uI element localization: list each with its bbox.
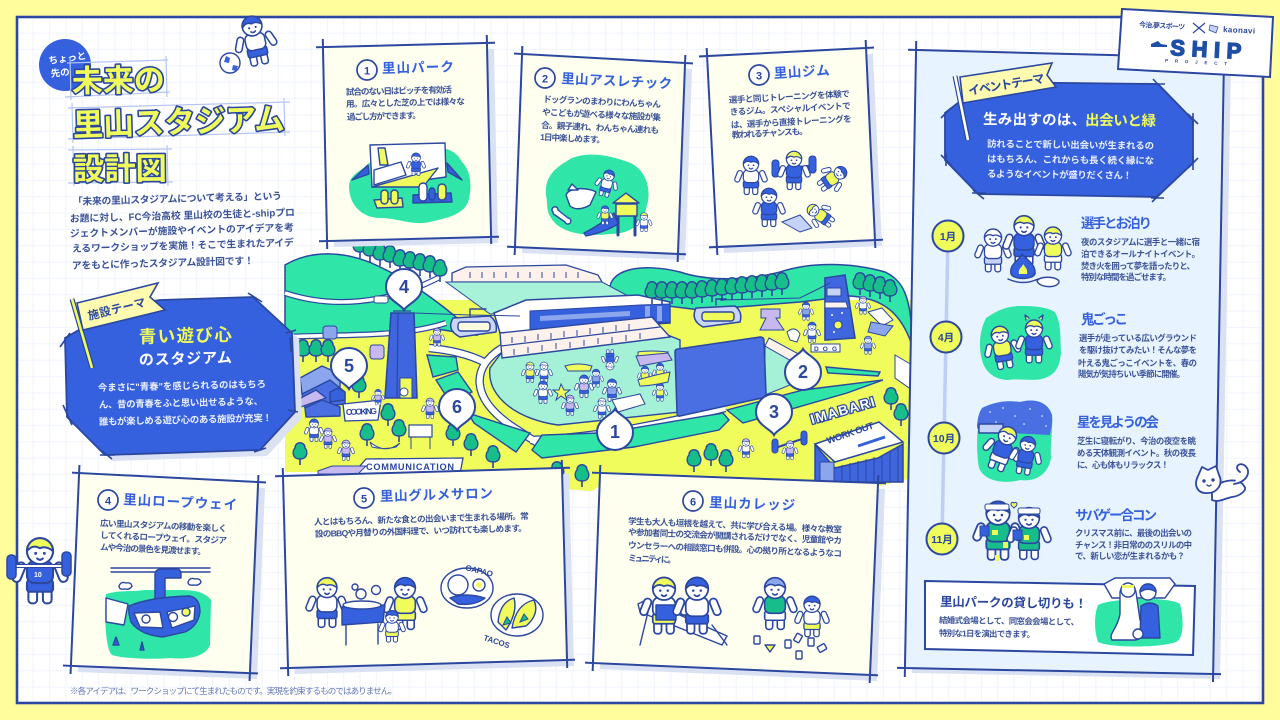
number badge [354,488,374,508]
card text: 合。親子連れ、わんちゃん連れも [541,119,659,135]
illustration: wedding [1095,578,1183,646]
event text: 4: 鬼ごっこ [1081,311,1128,327]
card text: 学生も大人も垣根を越えて、共に学び合える場。様々な教室 [628,515,843,535]
card heading: 里山グルメサロン [380,485,493,504]
picnic people [304,296,445,460]
card 5: gourmet salon [276,461,574,675]
facility flag: 施設テーマ [86,295,147,323]
card text: 広い里山スタジアムの移動を楽しく [100,517,227,534]
number badge: 6 [690,496,696,508]
facility body text: 誰もが楽しめる遊び心のある施設が充実！ [99,412,272,427]
event text: 4 [1078,311,1197,379]
event heading: 生み出すのは、 [983,111,1086,129]
event text: 4: 叶える鬼ごっこイベントを、春の [1078,358,1197,368]
number badge: 5 [361,494,367,506]
card heading: 里山ジム [773,63,830,81]
intro text: 「未来の里山スタジアムについて考える」という [73,189,282,208]
title: 未来の [72,62,165,99]
event body text: 訪れることで新しい出会いが生まれるの [987,138,1154,151]
left hill [285,254,476,336]
card text: やこどもが遊べる様々な施設が集 [542,106,662,122]
character: soccer kid [220,12,282,73]
map pin 3: 3 [769,402,779,422]
callout: private hire [925,578,1195,655]
facility body text [98,378,272,427]
event text: 10: 星を見ようの会 [1077,415,1160,430]
event text: 10: 芝生に寝転がり、今治の夜空を眺 [1077,436,1197,446]
illustration: gondola [105,568,211,659]
card text: 教われるチャンスも。 [732,125,808,140]
event text: 1: 焚き火を囲って夢を語ったりと、 [1081,261,1195,271]
card text: 用。広々とした芝の上では様々な [346,95,465,109]
card heading: 里山カレッジ [709,495,795,513]
callout: private hire: 里山パークの貸し切りも！ [940,594,1087,611]
illustration: survival game [972,501,1052,561]
event text: 11: サバゲー合コン [1075,507,1157,523]
green verges [532,413,729,458]
number badge: 1 [364,66,370,78]
card text [314,510,529,539]
illustration: gapao and tacos: GAPAO [465,563,494,579]
illustration: gapao and tacos [441,563,543,650]
illustration: gapao and tacos: TACOS [482,633,511,650]
event text: 4: を駆け抜けてみたい！そんな夢を [1079,345,1197,355]
number badge [98,490,118,510]
card 4: ropeway [64,466,265,680]
play area and dog run [760,296,912,390]
event text: 10: める天体観測イベント。秋の夜長 [1077,448,1197,458]
card text: 選手と同じトレーニングを体験で [729,88,850,105]
gondola left [451,309,496,337]
title: 里山スタジアム [72,102,285,143]
card heading: 里山パーク [382,59,454,76]
pitch [490,332,680,425]
intro text: お題に対し、FC今治高校 里山校の生徒と-shipプロ [70,206,295,225]
card heading: 里山アスレチック [561,71,672,91]
communication banner [318,458,463,474]
left village buildings [297,366,345,417]
card text: 人とはもちろん、新たな食との出会いまで生まれる場所。常 [314,510,529,527]
intro text: アをもとに作ったスタジアム設計図です！ [72,254,254,272]
road around pitch [429,348,725,446]
event text: 1: 選手とお泊り [1081,215,1152,231]
title: 設計図 [73,151,167,187]
intro text: ジェクトメンバーが施設やイベントのアイデアを考 [70,221,294,240]
illustration: play with cards [752,578,830,659]
facility body text: 今まさに"青春"を感じられるのはもちろ [98,378,266,393]
card 2: athletics [508,47,692,261]
title badge [39,39,91,91]
seating rows [500,317,670,358]
character: dog [1196,464,1248,501]
event text: 1 [1081,215,1200,282]
event flag [955,63,1056,140]
number badge [749,65,769,85]
map pin 4: 4 [399,277,409,297]
card text [628,515,843,565]
logo box: PROJECT [1165,58,1227,66]
intro text: えるワークショップを実施！そこで生まれたアイデ [72,236,294,255]
month 11 [926,524,958,554]
event theme hexagon [941,63,1198,202]
tree rows [353,236,897,304]
map pin 6 [439,389,475,430]
map pin 4 [386,269,422,310]
panel: facility theme: のスタジアム [139,350,232,369]
character: barbell athlete [7,538,71,603]
right tower [825,275,855,340]
panel: events [898,42,1231,681]
month 1 [932,220,964,252]
card 6: college [586,466,885,682]
title badge: ちょっと [48,51,87,67]
communication banner: COMMUNICATION [366,462,454,472]
card text: 設のBBQや月替りの外国料理で、いつ訪れても楽しめます。 [315,522,527,539]
logo box: SHIP [1170,35,1242,64]
card heading: 里山ロープウェイ [123,492,237,513]
event text: 11: クリスマス前に、最後の出会いの [1075,528,1192,538]
month 4: 4月 [938,332,954,344]
map pin 1 [597,409,633,450]
card text [540,93,662,145]
workout runner and machine [738,431,807,460]
logo box: kaonavi [1223,25,1255,36]
panel: facility theme [60,283,302,461]
event text: 1: 泊できるオールナイトイベント。 [1081,249,1200,259]
illustration: bench [638,578,727,645]
card text [100,517,228,557]
people on pitch [521,350,672,418]
illustration: outdoor cinema [349,143,470,223]
event text: 4: 選手が走っている広いグラウンド [1079,333,1197,343]
illustration: bbq [305,578,428,645]
illustration: stargazing [976,401,1052,482]
imabari sign: IMABARI [809,394,876,427]
illustration: five athletes [734,151,854,234]
cooking banner [343,400,381,421]
event flag: イベントテーマ [967,71,1045,98]
facility heading: 青い遊び心 [139,325,233,347]
month 4 [930,322,962,352]
facility body text: ん、昔の青春をふと思い出せるような、 [99,395,263,410]
event theme hexagon: 出会いと緑 [1085,112,1157,130]
right hill [610,264,912,345]
card text: きるジム。スペシャルイベントで [730,101,851,117]
logo box: 今治.夢スポーツ [1139,20,1185,31]
hill roads [285,278,446,337]
card text: 1日中楽しめます。 [540,131,605,145]
logo box [1118,9,1273,77]
gondola right [694,299,741,327]
illustration: campfire [974,216,1072,287]
card text: ウンセラーへの相談窓口も併設。心の拠り所となるようなコ [628,539,842,559]
event text: 10 [1077,415,1197,470]
map pin 2: 2 [798,362,808,382]
map ground [285,300,912,491]
number badge [683,491,703,511]
event text: 4: 陽気が気持ちいい季節に開催。 [1078,369,1185,379]
event text: 1: 夜のスタジアムに選手と一緒に宿 [1081,237,1200,247]
character: barbell athlete: 10 [34,572,42,579]
play area and dog run: DOG [814,346,837,353]
number badge: 4 [105,496,112,508]
event text: 11: で、新しい恋が生まれるかも？ [1075,551,1185,561]
back stand [452,265,602,282]
title [65,56,290,187]
card text [346,84,465,122]
event text: 1: 特別な時間を過ごせます。 [1081,272,1171,282]
event text: 11: チャンス！非日常ののスリルの中 [1075,540,1192,550]
left tower [385,311,417,398]
event body text: るようなイベントが盛りだくさん！ [987,168,1132,181]
card text: ムや今治の景色を見渡せます。 [100,541,206,557]
footnote: ※各アイデアは、ワークショップにて生まれたものです。実現を約束するものではありません。 [70,685,397,696]
timeline [926,220,964,554]
card 1: park [317,36,498,248]
rope cable [414,283,830,316]
scattered trees [293,340,908,487]
stadium roof [494,295,670,333]
card 3: gym [700,41,882,254]
illustration: tag game [980,306,1061,380]
card text: 過ごし方ができます。 [347,109,421,122]
callout: private hire: 結婚式会場として、同窓会会場として、 [939,615,1079,627]
title badge: 先の [50,66,70,80]
big screen [675,337,766,416]
map pin 1: 1 [610,422,620,442]
card text: ドッグランのまわりにわんちゃん [543,93,662,109]
month 1: 1月 [940,231,956,243]
map pin 6: 6 [452,397,462,417]
facility flag [72,283,165,368]
month 11: 11月 [931,534,953,546]
card text: ミュニティに。 [628,553,676,565]
cooking banner: COOKING [346,406,377,417]
event body text [987,138,1154,181]
workout building [815,420,903,482]
event body text: はもちろん、これからも長く続く縁にな [987,153,1154,166]
number badge [357,60,377,80]
stadium map [285,236,912,491]
card text: は、選手から直接トレーニングを [731,113,852,130]
map pin 3 [756,394,792,435]
intro text [70,189,295,272]
number badge: 3 [756,70,762,82]
card text: 試合のない日はピッチを有効活 [346,84,452,97]
month 10: 10月 [933,433,955,445]
card text [729,88,852,140]
map pin 2 [785,349,821,390]
card text: してくれるロープウェイ。スタジア [100,529,228,546]
number badge: 2 [542,74,548,86]
map pin 5: 5 [344,356,354,376]
number badge [535,68,555,88]
map pin 5 [331,348,367,389]
card text: や参加者同士の交流会が開講されるだけでなく、児童館やカ [628,526,842,546]
callout: private hire: 特別な1日を演出できます。 [939,628,1035,639]
event text: 11 [1075,507,1192,561]
event text: 10: に、心も体もリラックス！ [1077,460,1169,470]
illustration: dog and playground [546,155,652,236]
workout building: WORK OUT [825,420,875,447]
month 10 [928,422,960,454]
